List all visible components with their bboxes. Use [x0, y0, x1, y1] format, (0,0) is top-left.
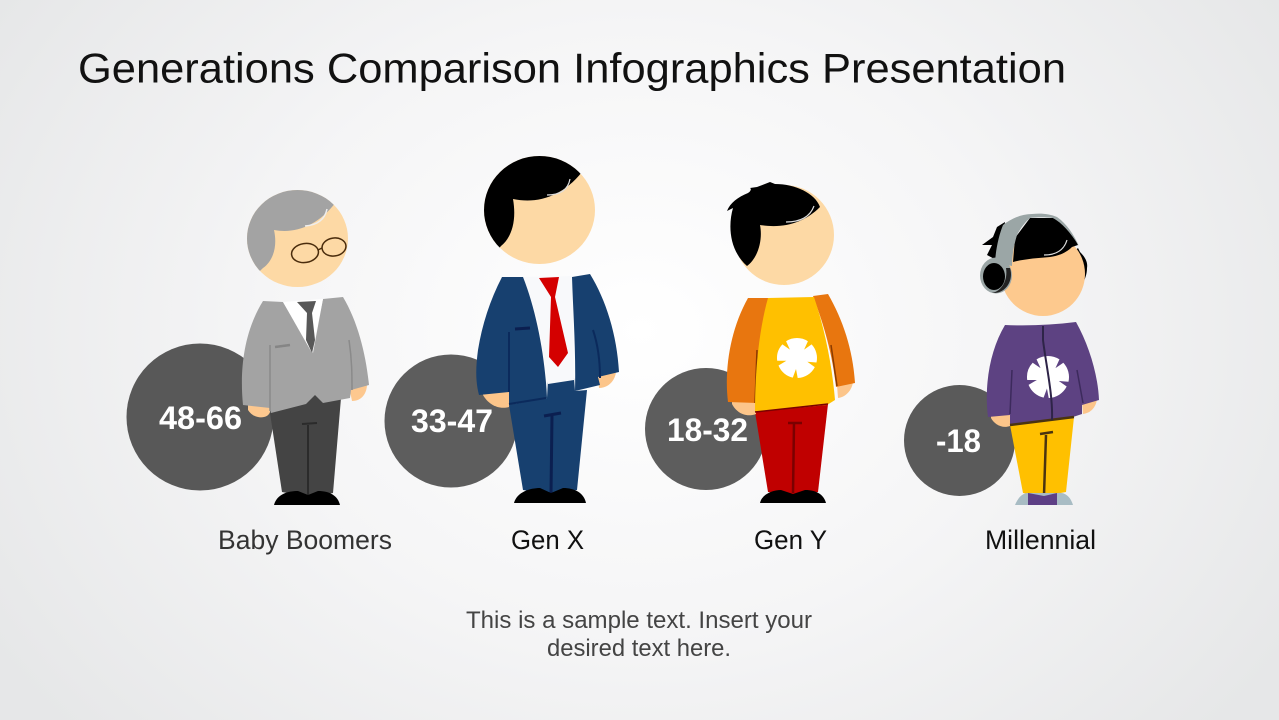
flower emblem [1027, 356, 1069, 398]
headphone ear cup [980, 258, 1012, 294]
head [1001, 232, 1085, 316]
black spiky hair [727, 182, 820, 266]
hair behind head [1070, 248, 1087, 283]
age circle: baby boomers: 48-66 [159, 400, 242, 436]
head [247, 190, 348, 287]
shoes [760, 490, 826, 503]
gray hair [247, 190, 334, 271]
tie [297, 301, 316, 353]
jacket [476, 277, 547, 405]
shoes [274, 491, 340, 505]
label: gen x: Gen X [511, 525, 584, 555]
hair highlight [786, 206, 814, 222]
hands [248, 403, 270, 417]
hands [483, 390, 510, 408]
black hair [484, 156, 580, 248]
label: gen y: Gen Y [754, 525, 827, 555]
label: baby boomers: Baby Boomers [218, 525, 392, 555]
trousers [509, 378, 587, 494]
age circle: gen y [645, 368, 767, 490]
hair highlight [547, 179, 570, 195]
sample text: desired text here. [547, 635, 731, 662]
age circle: gen x: 33-47 [411, 403, 493, 439]
purple hoodie [987, 322, 1099, 425]
figure: baby boomer [242, 190, 369, 505]
shirt [523, 276, 574, 384]
glasses [290, 236, 347, 264]
head [484, 156, 595, 264]
red trousers [755, 404, 828, 495]
sample text: This is a sample text. Insert your [466, 607, 812, 634]
hands [991, 414, 1011, 427]
hands [732, 400, 757, 415]
head [734, 185, 834, 285]
age circle: gen x [384, 354, 518, 488]
zipper [1043, 326, 1052, 420]
orange sleeves [727, 298, 769, 403]
hair highlight [305, 209, 327, 226]
shoes [514, 488, 586, 503]
black hair [1013, 218, 1078, 262]
tie [539, 277, 568, 367]
figure: gen y [727, 182, 855, 503]
generation labels [218, 525, 1096, 555]
age circle: millennial [904, 385, 1015, 496]
age circle: baby boomers [126, 344, 274, 490]
yellow shirt [755, 297, 835, 412]
flower emblem [777, 338, 817, 378]
hair highlight [1044, 240, 1067, 255]
side hair tufts [982, 222, 1005, 262]
figure: gen x [476, 156, 619, 503]
sample text [466, 607, 812, 662]
yellow trousers [1010, 417, 1074, 496]
age circle: gen y: 18-32 [667, 412, 748, 448]
title: Generations Comparison Infographics Presentation [78, 44, 1066, 92]
trousers [270, 390, 341, 497]
figure: millennial [980, 214, 1099, 505]
sneakers [1015, 493, 1073, 505]
age circle: millennial: -18 [936, 423, 981, 459]
shirt [283, 299, 323, 353]
jacket [242, 297, 369, 413]
headphone band [995, 214, 1079, 266]
label: millennial: Millennial [985, 525, 1096, 555]
